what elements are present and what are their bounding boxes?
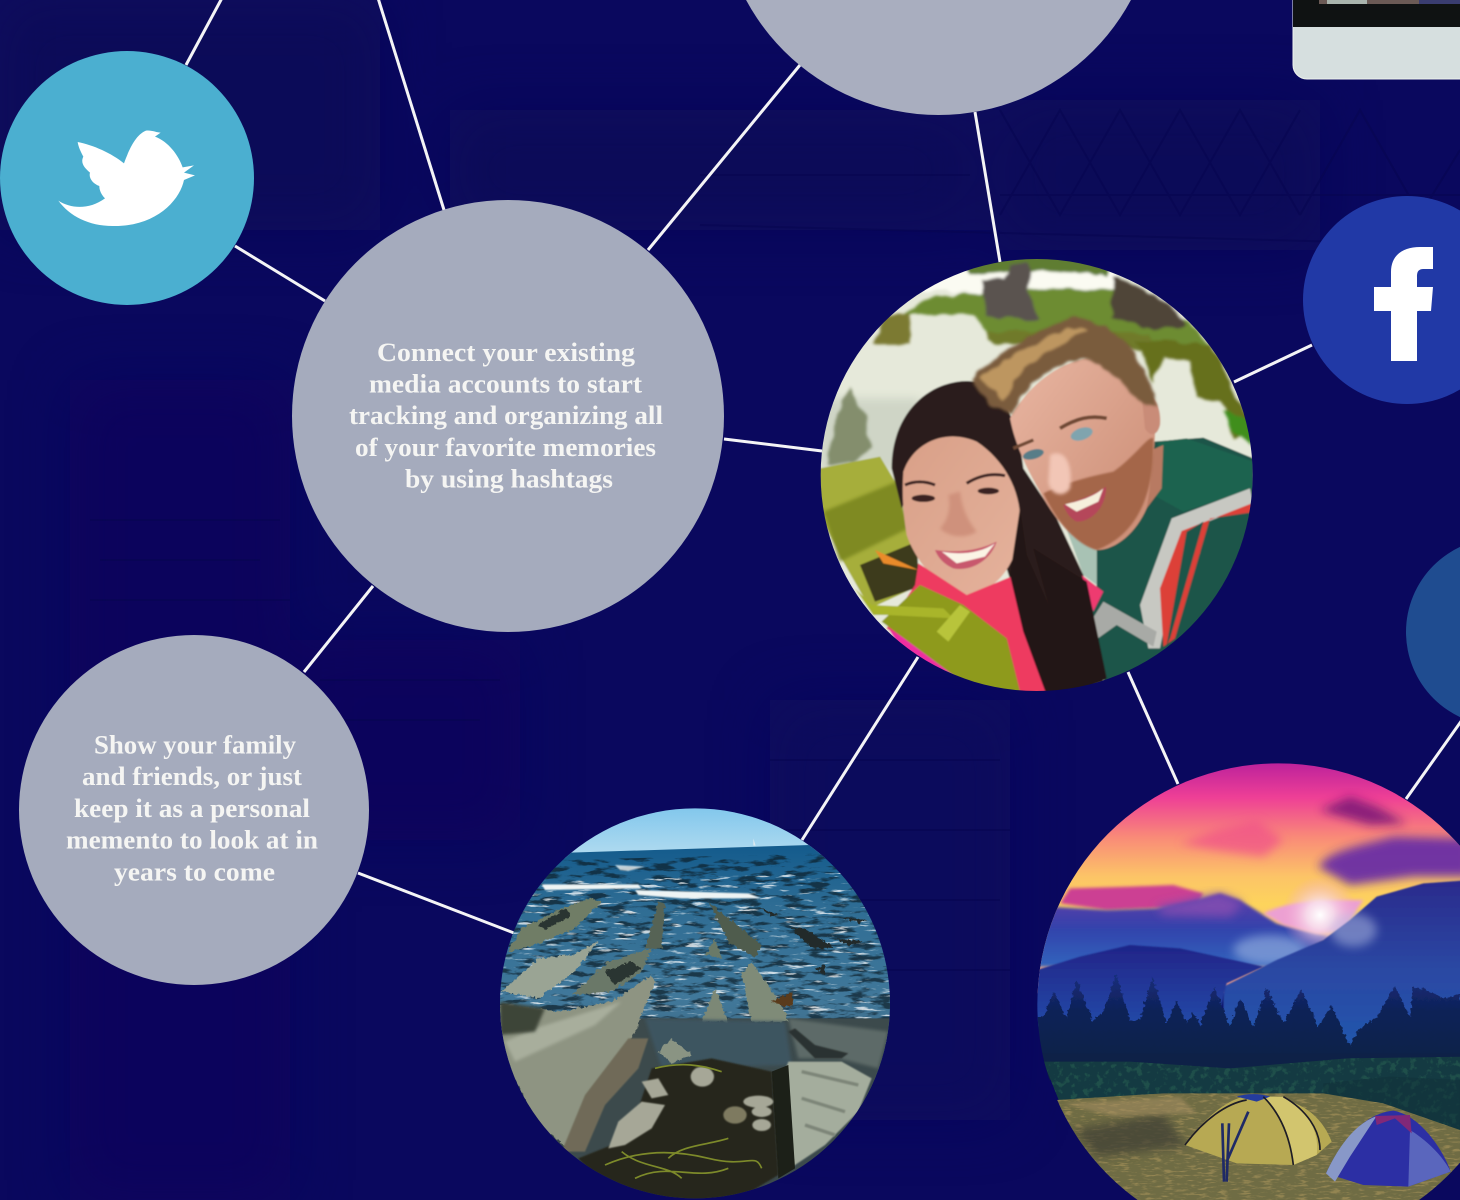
centre dark shallow <box>645 1018 792 1068</box>
woman's hair <box>892 381 1103 695</box>
man's jacket <box>1080 438 1253 685</box>
rock ridges <box>502 898 868 1022</box>
backpack <box>820 457 918 608</box>
slab right <box>786 1060 872 1166</box>
tent yellow <box>1185 1095 1332 1165</box>
panel: top-right card <box>1293 0 1460 79</box>
tent blue <box>1326 1111 1451 1187</box>
hair over shoulder <box>1010 510 1060 691</box>
text block: connect accounts: by using hashtags <box>405 464 613 494</box>
panel: top grey circle <box>720 0 1157 115</box>
icon: facebook f <box>1374 247 1433 361</box>
icon: twitter bird <box>58 131 195 226</box>
text block: family and friends: Show your family <box>94 730 296 760</box>
text block: connect accounts: media accounts to start <box>369 370 642 398</box>
far mountains <box>1030 893 1330 973</box>
shrubs <box>1043 1057 1460 1133</box>
connector lines <box>186 0 1460 933</box>
text block: connect accounts: Connect your existing <box>377 338 635 367</box>
straps <box>1140 488 1253 648</box>
grass <box>1057 1093 1460 1200</box>
text block: family and friends: keep it as a personal <box>74 794 310 823</box>
lower base <box>495 1018 895 1200</box>
text block: family and friends: memento to look at in <box>66 826 319 854</box>
water behind neck <box>1067 530 1098 585</box>
panel: family and friends <box>19 635 369 985</box>
text block: connect accounts: tracking and organizing all <box>349 401 663 430</box>
man's neck <box>1146 444 1165 508</box>
water texture <box>495 852 895 1058</box>
large slab left <box>500 975 655 1152</box>
treeline <box>1030 973 1460 1080</box>
olive strap <box>882 585 1020 695</box>
icon: partial right circle <box>1406 538 1460 726</box>
woman's jacket <box>887 563 1060 695</box>
man's hair <box>973 319 1157 415</box>
photo: rocky seashore <box>495 805 895 1200</box>
photo: selfie couple <box>820 255 1260 695</box>
woman's face <box>903 436 1020 595</box>
text block: connect accounts <box>349 338 663 494</box>
text block: connect accounts: of your favorite memories <box>355 433 656 462</box>
icon: facebook circle <box>1303 196 1460 404</box>
photo: sunset campsite <box>1030 760 1460 1200</box>
clouds <box>1180 820 1283 857</box>
man's face <box>1010 358 1155 550</box>
panel: connect accounts <box>292 200 724 632</box>
icon: twitter circle <box>0 51 254 305</box>
text block: family and friends: and friends, or just <box>82 762 302 791</box>
text block: family and friends <box>66 730 319 886</box>
text block: family and friends: years to come <box>114 858 275 886</box>
seaweed <box>578 1058 778 1200</box>
